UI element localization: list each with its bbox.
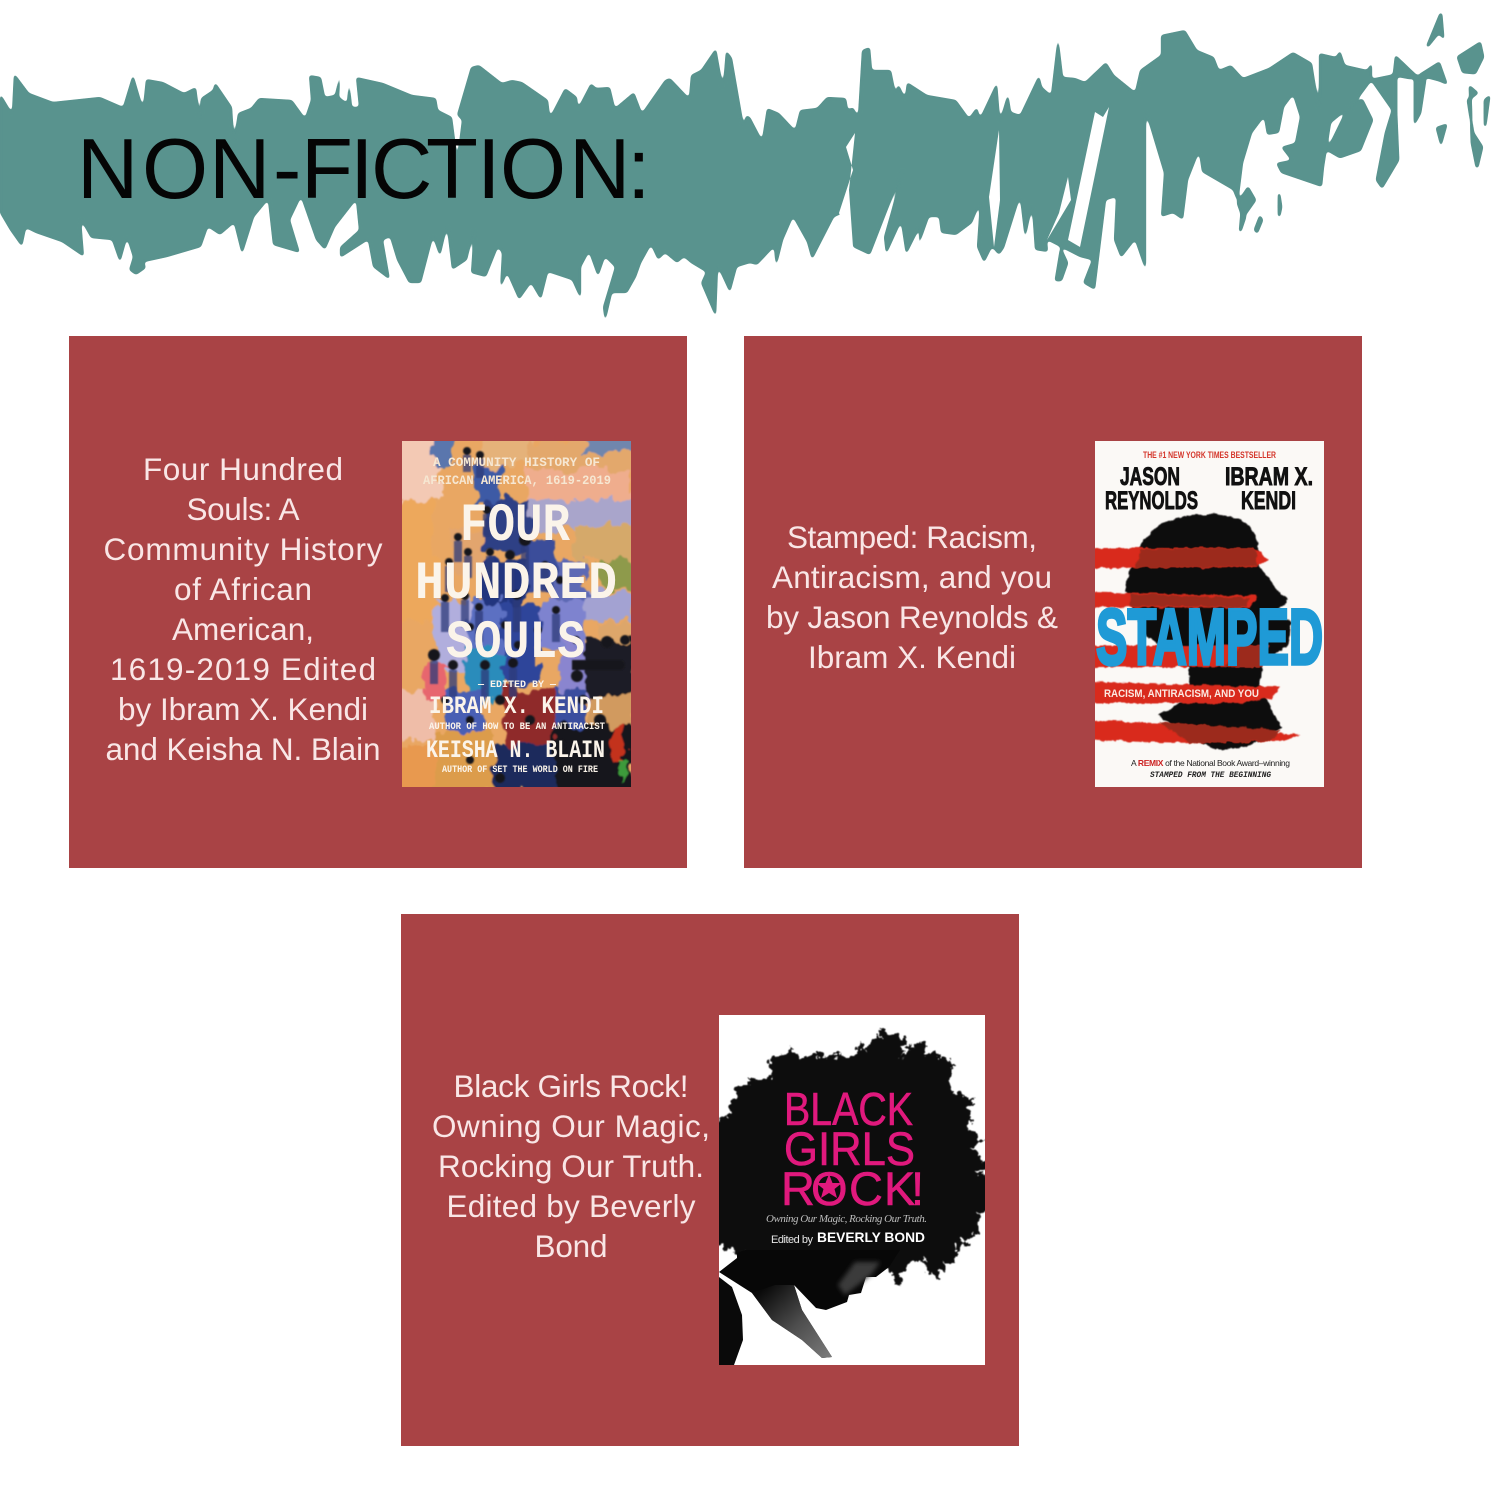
book description: Black Girls Rock: Bond xyxy=(534,1228,608,1264)
book description: Stamped: Ibram X. Kendi xyxy=(808,639,1016,675)
book cover: Stamped: IBRAM X. xyxy=(1225,463,1313,491)
title: NON-FICTION: xyxy=(77,122,651,217)
book description: Black Girls Rock: Edited by Beverly xyxy=(446,1188,696,1224)
book cover: Four Hundred Souls xyxy=(395,435,635,795)
book cover: Black Girls Rock: Edited by xyxy=(771,1234,814,1246)
book description: Stamped: Stamped: Racism, xyxy=(787,519,1037,555)
cover text: BLACK xyxy=(784,1083,913,1135)
book description: Four Hundred Souls: 1619-2019 Edited xyxy=(110,651,376,687)
book description: Four Hundred Souls: by Ibram X. Kendi xyxy=(118,691,368,727)
panel: Stamped xyxy=(744,336,1362,868)
panel: Four Hundred Souls xyxy=(69,336,687,868)
crowd colours xyxy=(475,465,500,505)
red brush bars xyxy=(1090,548,1301,743)
cover text xyxy=(784,1092,920,1206)
cover title text: — EDITED BY — xyxy=(477,680,557,691)
book cover: Stamped: JASON xyxy=(1120,463,1180,491)
book description: Stamped: Antiracism, and you xyxy=(772,559,1052,595)
book description: Four Hundred Souls: Souls: A xyxy=(186,491,300,527)
cover title text: IBRAM X. KENDI xyxy=(429,692,604,721)
book cover: Stamped: STAMPED FROM THE BEGINNING xyxy=(1150,770,1271,780)
cover title text: AUTHOR OF SET THE WORLD ON FIRE xyxy=(442,765,598,776)
cover title text: FOUR xyxy=(460,496,571,557)
cover title text: SOULS xyxy=(446,613,585,674)
book description: Four Hundred Souls: American, xyxy=(172,611,314,647)
book cover: Stamped: REYNOLDS xyxy=(1105,487,1198,515)
cover title text: AUTHOR OF HOW TO BE AN ANTIRACIST xyxy=(429,722,605,733)
cover title text xyxy=(415,456,617,776)
book description: Stamped: by Jason Reynolds & xyxy=(766,599,1058,635)
book description: Stamped xyxy=(766,519,1058,675)
book description: Four Hundred Souls: Four Hundred xyxy=(143,451,343,487)
panel: Black Girls Rock xyxy=(401,914,1019,1446)
face and neck xyxy=(719,1250,888,1358)
book description: Black Girls Rock: Black Girls Rock! xyxy=(454,1068,688,1104)
book description: Four Hundred Souls: and Keisha N. Blain xyxy=(106,731,380,767)
book cover: Black Girls Rock xyxy=(700,1015,992,1365)
crowd figures xyxy=(428,447,630,783)
cover title text: AFRICAN AMERICA, 1619-2019 xyxy=(423,474,611,488)
book description: Black Girls Rock xyxy=(432,1068,710,1264)
book cover: Stamped: STAMPED xyxy=(1096,592,1323,681)
book description: Black Girls Rock: Owning Our Magic, xyxy=(432,1108,710,1144)
cover text: ROCK! xyxy=(781,1162,924,1215)
cover title text: HUNDRED xyxy=(415,554,617,615)
book description: Four Hundred Souls: of African xyxy=(174,571,312,607)
brush stroke banner xyxy=(0,13,1489,323)
book cover: Black Girls Rock: BEVERLY BOND xyxy=(817,1229,925,1245)
cover title text: A COMMUNITY HISTORY OF xyxy=(433,456,600,470)
shoulder xyxy=(719,1277,743,1365)
cover title text: KEISHA N. BLAIN xyxy=(426,736,605,765)
afro silhouette xyxy=(712,1030,992,1287)
brush stroke slits xyxy=(839,107,1109,247)
book description: Four Hundred Souls xyxy=(104,451,383,767)
book description: Four Hundred Souls: Community History xyxy=(104,531,383,567)
cover text: THE #1 NEW YORK TIMES BESTSELLER xyxy=(1143,450,1276,461)
book cover: Stamped: A REMIX of the National Book Award–winning xyxy=(1131,758,1290,768)
book cover: Black Girls Rock: Owning Our Magic, Rocking Our Truth. xyxy=(766,1213,927,1225)
icon: star xyxy=(818,1176,840,1198)
cover text: GIRLS xyxy=(784,1122,915,1175)
book cover: Stamped: KENDI xyxy=(1241,487,1296,515)
head silhouette xyxy=(1125,514,1291,751)
book description: Black Girls Rock: Rocking Our Truth. xyxy=(438,1148,704,1184)
book cover: Stamped xyxy=(1090,441,1324,787)
book cover: Stamped: RACISM, ANTIRACISM, AND YOU xyxy=(1104,688,1259,700)
